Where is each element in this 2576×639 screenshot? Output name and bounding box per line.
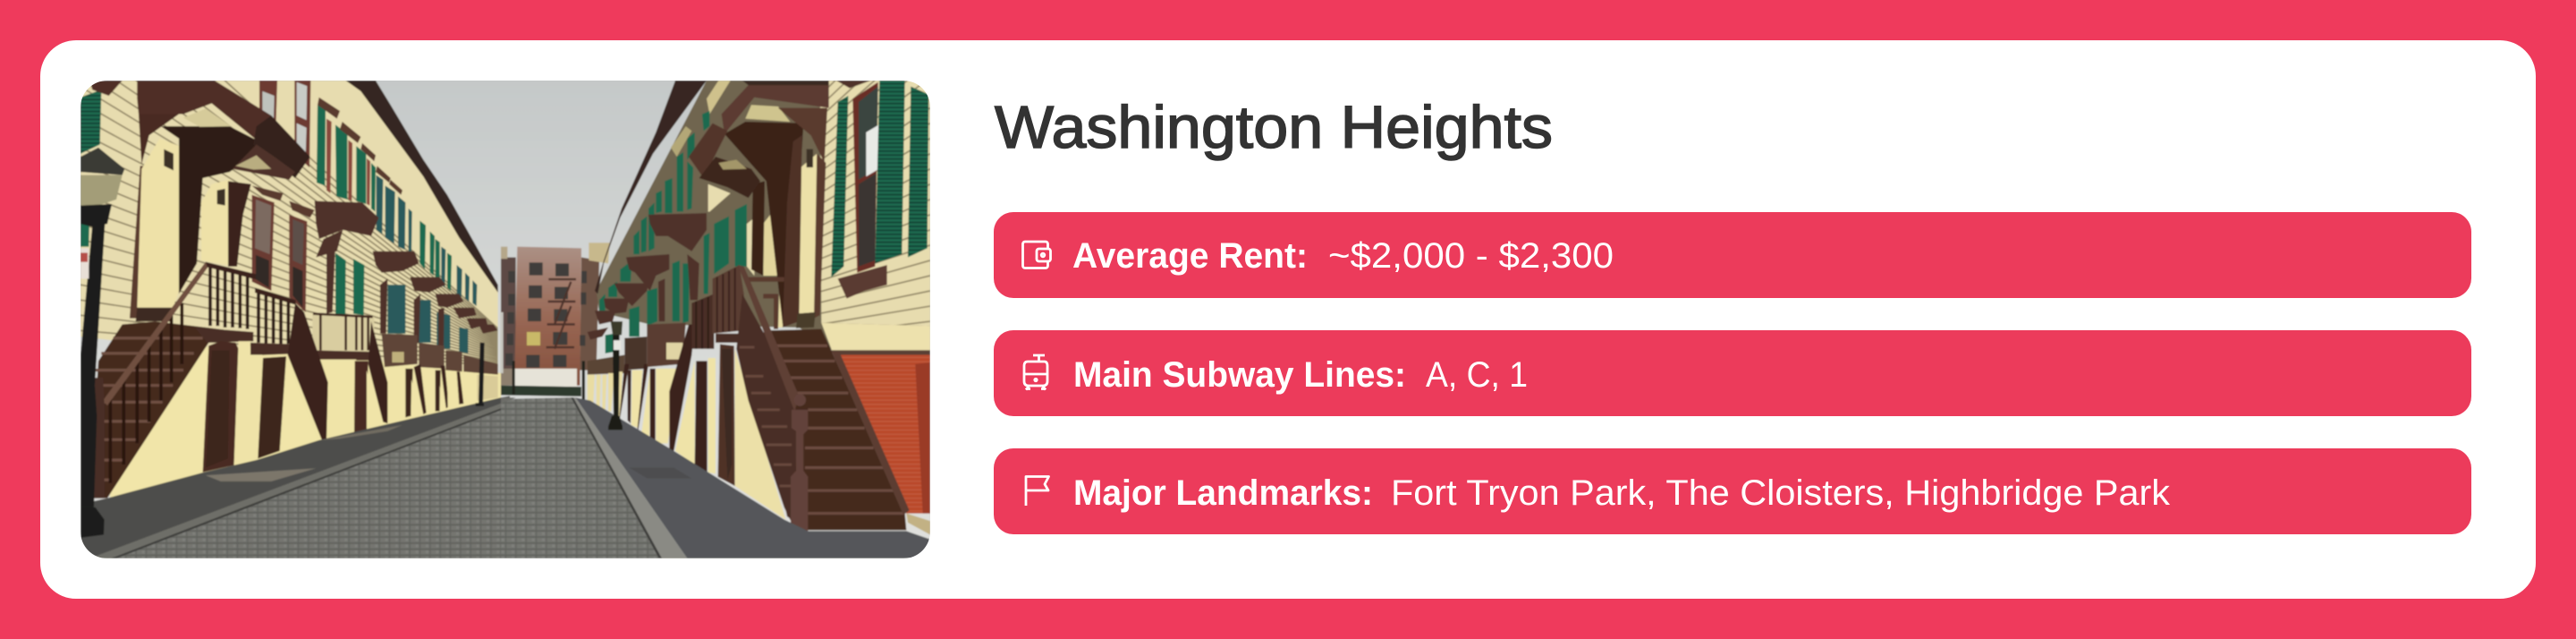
value: average rent: ~$2,000 - $2,300 bbox=[1328, 236, 1614, 276]
row: major landmarks bbox=[994, 448, 2471, 534]
right row of houses and distant apartment block bbox=[500, 81, 930, 558]
left row of houses bbox=[80, 81, 511, 558]
icon: flag bbox=[1026, 476, 1048, 506]
icon: tram bbox=[1024, 355, 1047, 390]
label: major landmarks: Major Landmarks: bbox=[1073, 473, 1373, 513]
icon: wallet bbox=[1023, 242, 1050, 268]
heading: Washington Heights bbox=[995, 95, 1553, 161]
value: major landmarks: Fort Tryon Park, The Cloisters, Highbridge Park bbox=[1391, 473, 2171, 513]
row: average rent bbox=[994, 212, 2471, 298]
value: main subway lines: A, C, 1 bbox=[1426, 355, 1528, 395]
photo: rowhouses on a cobblestone street bbox=[80, 81, 930, 558]
label: average rent: Average Rent: bbox=[1072, 236, 1308, 276]
label: main subway lines: Main Subway Lines: bbox=[1073, 355, 1406, 395]
row: main subway lines bbox=[994, 330, 2471, 416]
